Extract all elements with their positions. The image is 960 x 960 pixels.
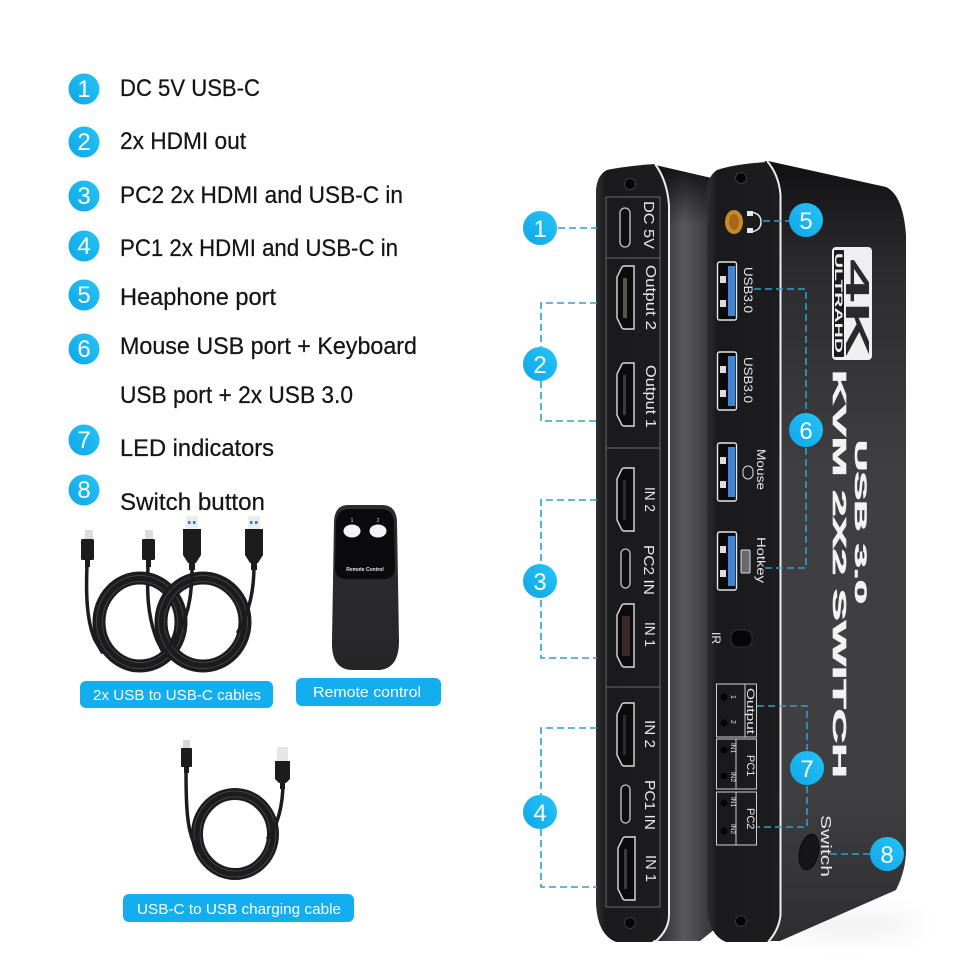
accessory: two USB to USB-C cables xyxy=(81,516,263,668)
item 6: 6 xyxy=(77,336,91,363)
item 6: Mouse USB port + Keyboard xyxy=(120,333,417,360)
panel edge highlight xyxy=(767,161,780,942)
item 7: LED indicators xyxy=(120,435,274,462)
callout lines xyxy=(541,221,870,887)
product title: USB 3.0 xyxy=(851,440,870,604)
rear panel labels: IN 1 xyxy=(642,855,659,882)
ports: HDMI xyxy=(617,266,635,900)
rear panel labels: DC 5V xyxy=(640,201,657,249)
rear panel face xyxy=(596,164,668,942)
switch label: Switch xyxy=(817,815,834,877)
callout badge 2: 2 xyxy=(533,352,547,379)
accessory: remote control: Remote Control xyxy=(346,567,384,573)
callout badge 3: 3 xyxy=(533,569,547,596)
panel edge highlight xyxy=(655,164,669,942)
headphone jack xyxy=(725,210,761,234)
LED panel: Output: 1 xyxy=(729,695,736,699)
icon: mouse xyxy=(743,466,753,479)
front panel labels: USB3.0 xyxy=(741,267,755,313)
accessory: remote control: 1 xyxy=(351,518,354,524)
callout badge 5 xyxy=(789,203,823,237)
front panel labels xyxy=(709,267,768,644)
port: DC USB-C xyxy=(620,208,630,247)
panel frame xyxy=(606,197,660,907)
side top shading xyxy=(655,165,720,225)
item 1 xyxy=(68,74,260,104)
rear panel labels: IN 2 xyxy=(641,720,658,748)
LED panel: Output xyxy=(716,684,756,737)
callout badge 6: 6 xyxy=(799,418,813,445)
callout badge 8: 8 xyxy=(880,842,894,869)
rear panel labels: PC1 IN xyxy=(641,780,658,830)
switch button xyxy=(796,832,822,872)
rear panel labels: IN 1 xyxy=(641,622,658,647)
item 8: 8 xyxy=(77,477,91,504)
top side face xyxy=(765,161,906,941)
floor shadow xyxy=(780,915,920,935)
accessory: remote control xyxy=(332,505,399,670)
item 4 xyxy=(68,230,398,262)
label: USB to USB-C cables xyxy=(80,681,273,708)
label: remote control: Remote control xyxy=(313,684,421,701)
IR receiver xyxy=(731,630,752,647)
screws xyxy=(736,172,746,926)
callout badge 6 xyxy=(789,413,823,447)
callout badge 1 xyxy=(523,211,557,245)
item 2 xyxy=(68,126,246,158)
rear panel labels: IN 2 xyxy=(641,487,658,512)
item 2: 2x HDMI out xyxy=(120,128,246,155)
callout badge 4: 4 xyxy=(533,800,547,827)
4K Ultra HD logo: 4K xyxy=(839,259,876,357)
callout badge 5: 5 xyxy=(799,208,813,235)
item 5: 5 xyxy=(77,282,91,309)
LED panel: PC1: IN1 xyxy=(729,743,736,754)
LED panel: PC1 xyxy=(716,739,756,789)
item 6: USB port + 2x USB 3.0 xyxy=(120,382,353,409)
callout badge 7: 7 xyxy=(800,756,814,783)
item 6 xyxy=(68,333,417,409)
callout badge 7 xyxy=(790,751,824,785)
label: charging cable xyxy=(123,894,354,922)
label: remote control xyxy=(296,678,441,706)
item 4: PC1 2x HDMI and USB-C in xyxy=(120,235,398,262)
rear panel labels: Output 1 xyxy=(642,365,659,428)
front panel labels: USB3.0 xyxy=(741,357,755,403)
label: charging cable: USB-C to USB charging cable xyxy=(137,901,341,918)
side face of rear unit xyxy=(655,165,720,941)
accessory: USB-C to USB charging cable xyxy=(181,740,290,877)
device: rear panel unit xyxy=(596,164,720,942)
front panel labels: Mouse xyxy=(754,449,768,490)
front panel face xyxy=(707,162,780,942)
ports: USB-C inputs xyxy=(621,549,630,823)
item 3: PC2 2x HDMI and USB-C in xyxy=(120,182,403,209)
rear panel labels: Output 2 xyxy=(642,265,659,330)
item 4: 4 xyxy=(77,233,91,260)
LED panel: PC1: PC1 xyxy=(744,755,756,776)
item 3: 3 xyxy=(77,183,91,210)
LED panel: Output: Output xyxy=(744,688,756,734)
callout badge 2 xyxy=(523,347,557,381)
label: USB to USB-C cables: 2x USB to USB-C cables xyxy=(93,687,261,704)
4K Ultra HD logo xyxy=(832,247,876,360)
item 8 xyxy=(68,474,265,516)
front panel labels: IR xyxy=(709,632,723,644)
item 5: Heaphone port xyxy=(120,284,276,311)
screws xyxy=(624,178,636,928)
item 8: Switch button xyxy=(120,489,265,516)
LED panel: PC2: PC2 xyxy=(744,808,756,829)
LED panel: PC2 xyxy=(716,792,756,845)
LED panel: Output: 2 xyxy=(729,720,736,724)
LED panel: PC2: IN1 xyxy=(729,797,736,808)
callout badge 3 xyxy=(523,564,557,598)
front panel labels: Hotkey xyxy=(754,537,768,583)
USB ports xyxy=(718,262,736,590)
feature list xyxy=(68,74,417,516)
LED panel: PC1: IN2 xyxy=(729,772,736,782)
item 2: 2 xyxy=(77,129,91,156)
accessory: remote control: 2 xyxy=(377,518,380,524)
item 1: 1 xyxy=(77,76,91,103)
callout badge 4 xyxy=(523,795,557,829)
item 7 xyxy=(68,424,274,462)
callout badge 1: 1 xyxy=(533,216,547,243)
product title: KVM 2X2 SWITCH xyxy=(829,370,850,778)
device: front panel unit xyxy=(707,161,906,942)
rear panel labels: PC2 IN xyxy=(640,545,657,595)
rear panel labels xyxy=(640,201,659,882)
item 1: DC 5V USB-C xyxy=(120,75,260,102)
LED panel: PC2: IN2 xyxy=(729,824,736,834)
item 5 xyxy=(68,280,276,311)
product title xyxy=(829,370,870,778)
callout badge 8 xyxy=(870,837,904,871)
item 7: 7 xyxy=(77,427,91,454)
4K Ultra HD logo: ULTRAHD xyxy=(832,253,844,353)
icon: keyboard xyxy=(741,550,750,573)
